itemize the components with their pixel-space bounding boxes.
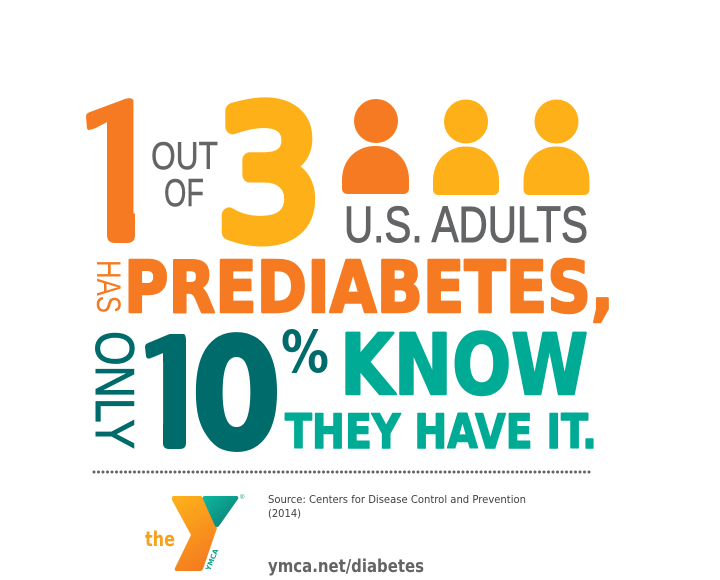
source note: [268, 493, 526, 520]
numeral 3: 3: [217, 73, 321, 278]
ten number: 10: [132, 314, 279, 477]
source note: Source: Centers for Disease Control and Prevention: [268, 493, 526, 506]
percent sign: %: [281, 318, 329, 386]
logo word ymca: YMCA: [204, 547, 221, 573]
icon: yellow person: [524, 100, 590, 195]
logo word the: the: [145, 527, 175, 551]
logo triangle: [203, 496, 238, 527]
source note: (2014): [268, 507, 301, 520]
icon: yellow person: [433, 100, 499, 195]
out of: [151, 135, 218, 215]
logo chevron: [172, 496, 217, 571]
ymca logo: [145, 494, 245, 573]
they have it: THEY HAVE IT.: [285, 405, 597, 460]
out of: OF: [164, 172, 204, 215]
has vertical label: HAS: [89, 260, 127, 313]
website url: ymca.net/diabetes: [268, 557, 424, 577]
only vertical label: ONLY: [84, 331, 146, 449]
know heading: KNOW: [340, 316, 588, 414]
out of: OUT: [151, 135, 218, 178]
u.s. adults label: U.S. ADULTS: [344, 196, 588, 253]
numeral 1: 1: [65, 59, 166, 288]
icon: orange person: [342, 99, 409, 194]
prediabetes heading: PREDIABETES,: [124, 246, 614, 329]
infographic: [86, 97, 609, 576]
registered mark: ®: [240, 494, 245, 501]
